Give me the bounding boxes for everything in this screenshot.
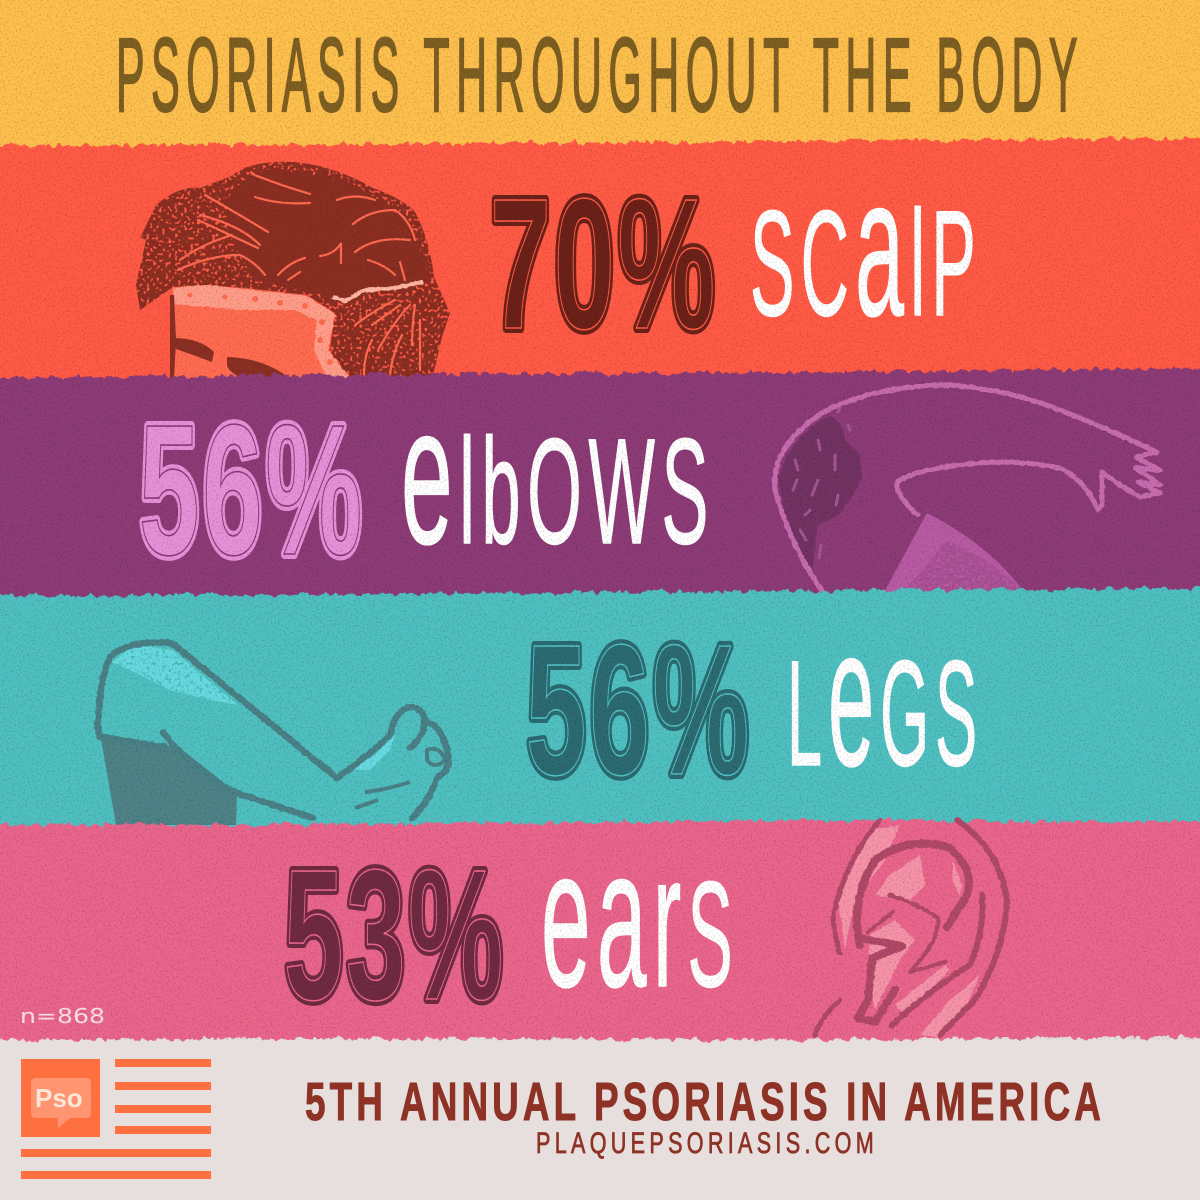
panel: scalp: [0, 136, 1200, 420]
stat: 70%: [490, 161, 718, 368]
hair strands: [178, 174, 420, 375]
eyebrows and face line: [170, 295, 292, 380]
leg outline: [97, 642, 449, 818]
arm outline: [775, 385, 1161, 594]
panel: footer: [0, 1037, 1200, 1200]
footer url: PLAQUEPSORIASIS.COM: [536, 1127, 878, 1160]
stat: 56% elbows: 56%: [139, 387, 365, 594]
panel: ears: [0, 807, 1200, 1060]
stat: 70%: 70%: [490, 161, 718, 368]
stat: 70%: 70%: [490, 161, 718, 368]
solid hair core: [225, 170, 428, 300]
flag stripes: [21, 1059, 211, 1179]
sample size note: n=868: [20, 1004, 105, 1028]
label: ears: earS: [541, 807, 739, 1028]
ear plaques: [838, 825, 980, 1038]
icon: ear with psoriasis: [815, 820, 1007, 1038]
torso wedge: [883, 513, 1025, 594]
label: scalp: SCalP: [750, 136, 982, 357]
shorts: [100, 733, 237, 825]
stat: 56% elbows: [139, 387, 365, 594]
speech bubble: [31, 1078, 91, 1128]
stat: 53%: 53%: [284, 832, 506, 1039]
panel: title band: [0, 0, 1200, 200]
label: legs: LeGS: [787, 586, 983, 807]
ear lines: [815, 820, 1007, 1035]
logo: Pso flag: [21, 1059, 211, 1179]
plaque flecks: [793, 407, 850, 558]
stat: 56% legs: [526, 607, 752, 814]
label: elbows: elbOWS: [401, 364, 715, 585]
elbow plaque: [778, 416, 862, 568]
stat: 56% legs: 56%: [526, 607, 752, 814]
scale line: [333, 282, 423, 301]
Pso wordmark: Pso: [35, 1083, 83, 1113]
stat: 56% legs: 56%: [526, 607, 752, 814]
stat: 53%: [284, 832, 506, 1039]
scalp plaque band: [173, 285, 352, 380]
stat: 56% elbows: 56%: [139, 387, 365, 594]
icon: bent arm with elbow psoriasis: [775, 385, 1161, 594]
panel: legs: [0, 586, 1200, 860]
toe highlight: [350, 735, 395, 770]
panel: elbows: [0, 364, 1200, 640]
foot creases: [355, 749, 445, 808]
plaque spots: [188, 292, 333, 365]
knee plaque: [112, 645, 238, 705]
icon: bent leg with knee psoriasis: [97, 642, 449, 825]
stat: 53%: 53%: [284, 832, 506, 1039]
icon: head with scalp psoriasis: [136, 162, 450, 380]
torso stipple: [900, 540, 1025, 594]
stippled hair edge: [136, 162, 450, 380]
